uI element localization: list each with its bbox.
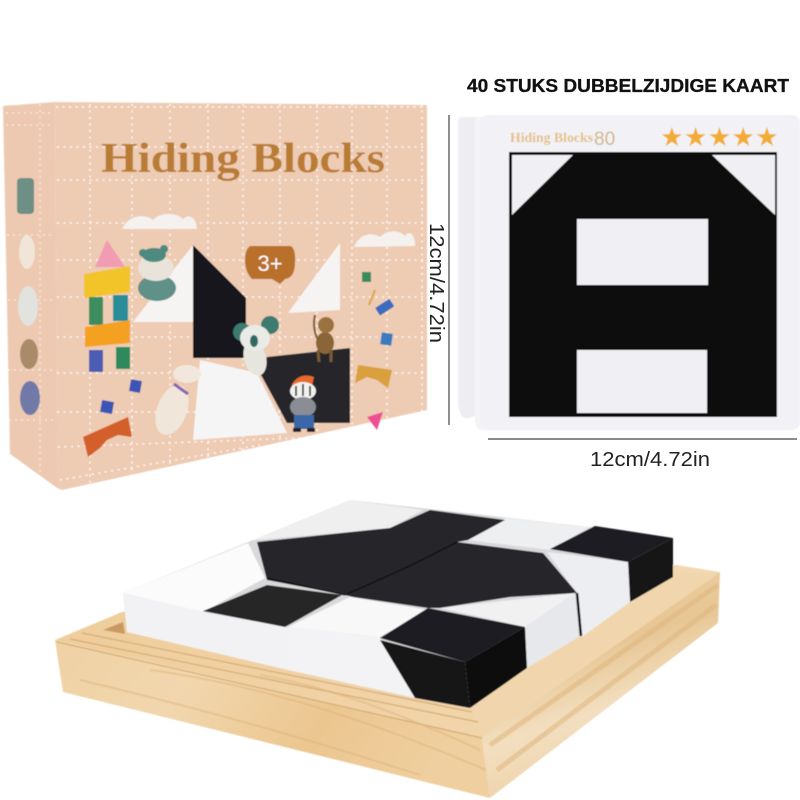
rating stars: ★★★★★ — [660, 122, 779, 153]
heading: 40 STUKS DUBBELZIJDIGE KAART — [467, 76, 789, 96]
icon: scattered pieces — [83, 272, 394, 457]
white block top right — [468, 518, 590, 550]
block gap shadow — [577, 593, 581, 636]
white block centre — [288, 597, 428, 698]
wooden tray with blocks — [55, 500, 720, 798]
puzzle window shapes — [133, 243, 350, 440]
box title: Hiding Blocks — [101, 136, 385, 182]
box side panel — [3, 102, 60, 490]
icon: monkey — [314, 315, 334, 362]
icon: speech bubble 3+: 3+ — [257, 251, 283, 276]
front card — [480, 115, 800, 430]
box front panel — [55, 102, 427, 490]
icon: koala — [233, 316, 279, 378]
black block front — [380, 608, 527, 708]
icon: zebra — [290, 376, 316, 432]
icon: speech bubble 3+ — [245, 246, 295, 284]
white block lower right — [440, 593, 579, 668]
icon: side panel animals — [17, 178, 40, 415]
black block right — [550, 526, 673, 602]
card brand text: 80 — [594, 129, 615, 150]
blocks base shadow — [123, 500, 673, 708]
white block left — [123, 543, 288, 670]
black block small — [203, 585, 342, 627]
block seam — [267, 542, 457, 595]
cloud left — [122, 214, 197, 229]
card brand text: Hiding Blocks — [510, 131, 594, 146]
back cards — [458, 117, 490, 430]
tray — [55, 565, 720, 798]
icon: colourful block tower — [84, 240, 130, 372]
white block right — [547, 552, 630, 637]
card brand text — [510, 129, 615, 150]
icon: polar bear — [149, 365, 201, 440]
black block centre — [345, 542, 577, 608]
cloud right — [354, 231, 415, 247]
puzzle pattern board — [509, 152, 777, 417]
product box — [3, 102, 427, 490]
box dotted grid — [56, 104, 427, 484]
icon: hippo — [138, 245, 176, 301]
card stack — [458, 115, 800, 430]
white block back — [253, 500, 423, 540]
height dimension: 12cm/4.72in — [425, 223, 447, 343]
black block top — [257, 510, 505, 595]
width dimension: 12cm/4.72in — [590, 449, 710, 471]
